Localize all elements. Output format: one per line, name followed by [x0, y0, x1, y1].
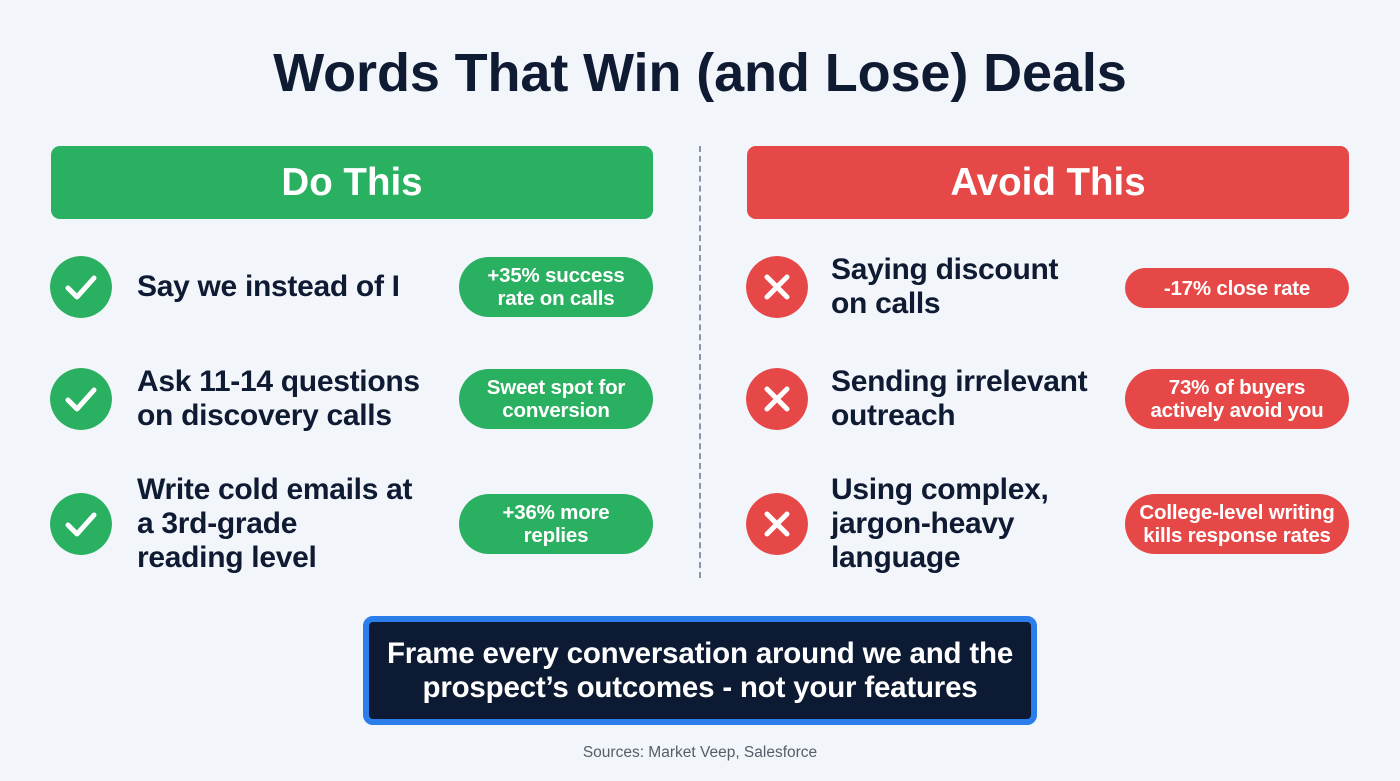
icon: x — [746, 256, 808, 318]
pill: replies — [524, 524, 588, 547]
icon: x — [746, 493, 808, 555]
row: avoid 3 — [746, 473, 1349, 574]
text: Using complex, — [831, 473, 1049, 506]
header: avoid this — [747, 146, 1349, 219]
header: avoid this: Avoid This — [950, 160, 1146, 204]
pill: 73% of buyers — [1169, 376, 1305, 399]
text: Saying discount — [831, 253, 1058, 286]
callout — [363, 616, 1037, 725]
text: Write cold emails at — [137, 473, 412, 506]
text: on discovery calls — [137, 399, 392, 432]
pill: +36% more — [502, 501, 610, 524]
callout: Frame every conversation around we and the — [387, 636, 1013, 670]
pill — [459, 494, 653, 554]
text — [830, 473, 1049, 574]
text — [137, 365, 420, 432]
pill — [1125, 494, 1349, 554]
pill: +35% success — [487, 264, 625, 287]
icon: x — [746, 368, 808, 430]
text: a 3rd-grade — [137, 507, 297, 540]
title: Words That Win (and Lose) Deals — [273, 43, 1127, 103]
text: language — [831, 541, 960, 574]
header: do this: Do This — [281, 160, 423, 204]
row: avoid 1 — [746, 253, 1349, 320]
text: outreach — [831, 399, 955, 432]
text: Sending irrelevant — [831, 365, 1087, 398]
icon: check — [50, 368, 112, 430]
sources: Sources: Market Veep, Salesforce — [583, 744, 817, 761]
pill — [1125, 369, 1349, 429]
text: Say we instead of I — [137, 270, 400, 303]
pill: College-level writing — [1139, 501, 1335, 524]
text: Ask 11-14 questions — [137, 365, 420, 398]
callout: prospect’s outcomes - not your features — [422, 670, 978, 704]
pill: rate on calls — [497, 287, 615, 310]
pill — [459, 257, 653, 317]
text: reading level — [137, 541, 317, 574]
header: do this — [51, 146, 653, 219]
text — [137, 473, 412, 574]
text — [831, 253, 1058, 320]
icon: check — [50, 256, 112, 318]
text: jargon-heavy — [831, 507, 1014, 540]
icon: check — [50, 493, 112, 555]
row: do 2 — [50, 365, 653, 432]
pill — [459, 369, 653, 429]
pill: conversion — [502, 399, 610, 422]
pill: -17% close rate — [1164, 276, 1310, 300]
pill: actively avoid you — [1150, 399, 1324, 422]
pill: kills response rates — [1143, 524, 1331, 547]
text: on calls — [831, 287, 940, 320]
dashed divider — [699, 146, 701, 578]
row: do 3 — [50, 473, 653, 574]
text — [831, 365, 1088, 432]
pill — [1125, 268, 1349, 308]
row: avoid 2 — [746, 365, 1349, 432]
pill: Sweet spot for — [487, 376, 625, 399]
row: do 1 — [50, 256, 653, 318]
